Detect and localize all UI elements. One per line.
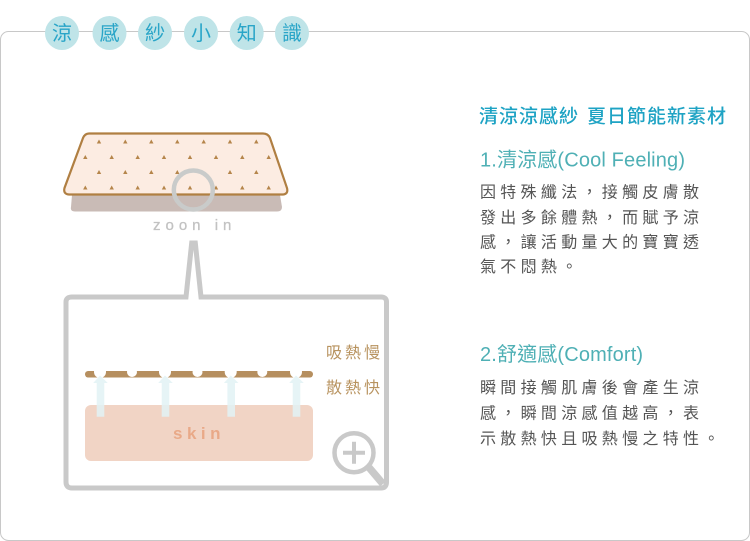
- section 1 body: [480, 184, 703, 276]
- fabric illustration: [64, 134, 287, 212]
- callout frame: [66, 243, 386, 488]
- section 1 body: 感，讓活動量大的寶寶透: [480, 232, 703, 252]
- section 2 body: [480, 379, 724, 448]
- label: slow heat absorption: 吸熱慢: [326, 343, 383, 362]
- heat arrows: [93, 376, 304, 417]
- section 1 body: 發出多餘體熱，而賦予涼: [480, 209, 703, 227]
- section 2 body: 瞬間接觸肌膚後會產生涼: [480, 379, 703, 397]
- icon: magnifier: [334, 433, 383, 484]
- section 2 body: 感，瞬間涼感值越高，表: [480, 404, 703, 422]
- title badges: 紗: [145, 22, 165, 45]
- section 1 body: 氣不悶熱。: [480, 258, 582, 276]
- title badges: 知: [237, 22, 257, 45]
- title badges: 感: [100, 22, 120, 45]
- main heading: 清涼涼感紗 夏日節能新素材: [479, 104, 727, 128]
- label: fast heat dissipation: 散熱快: [326, 379, 383, 397]
- fabric cross-section: [85, 366, 313, 378]
- title badges: 涼: [52, 22, 72, 45]
- fabric shadow: [71, 195, 282, 212]
- title badges: 小: [191, 22, 211, 45]
- section 2 body: 示散熱快且吸熱慢之特性。: [480, 429, 724, 448]
- title badges: [45, 16, 309, 50]
- skin layer: [85, 405, 313, 461]
- fabric swatch: [64, 134, 287, 194]
- section 2 heading: 2.舒適感(Comfort): [480, 343, 643, 366]
- section 1 body: 因特殊纖法，接觸皮膚散: [480, 184, 703, 202]
- title badges: 識: [282, 22, 302, 45]
- zoom circle: [174, 170, 213, 210]
- section 1 heading: 1.清涼感(Cool Feeling): [480, 148, 685, 172]
- zoom in label: zoon in: [153, 217, 236, 234]
- fabric dots: [83, 140, 271, 190]
- skin label: skin: [173, 424, 225, 443]
